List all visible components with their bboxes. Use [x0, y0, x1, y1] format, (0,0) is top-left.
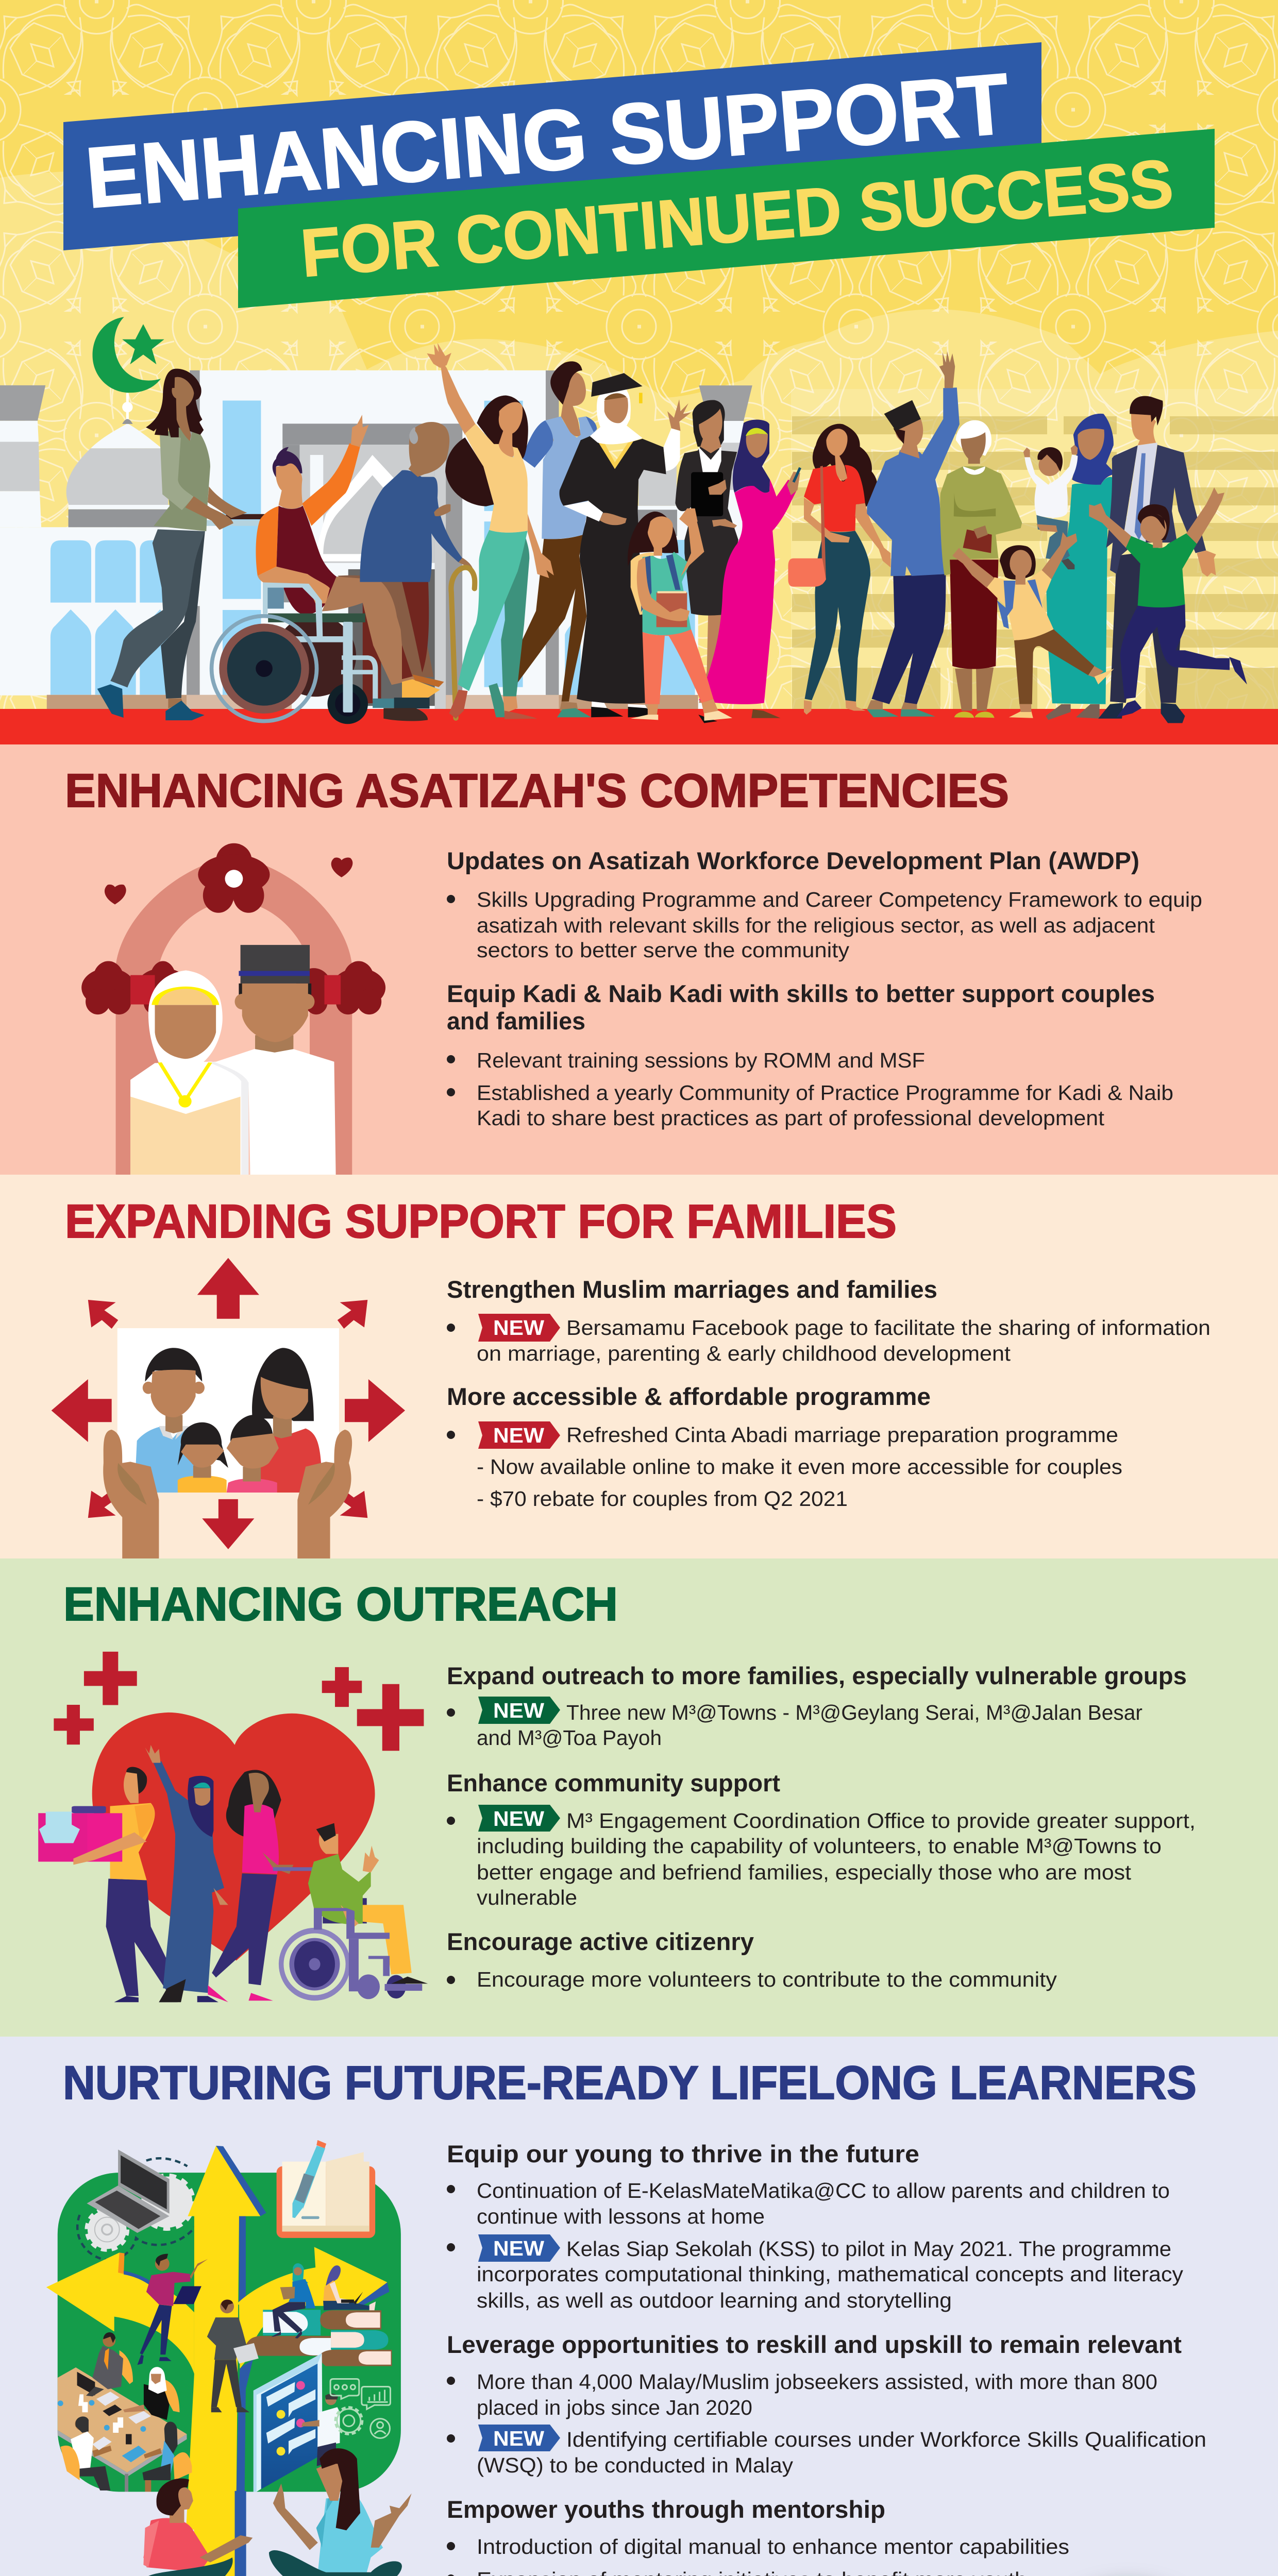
- title banner: Enhancing Support: ENHANCING SUPPORT: [82, 56, 1013, 226]
- text block: More accessible and affordable programme: - $70 rebate for couples from Q2 2021: [477, 1487, 848, 1511]
- text block: Updates on AWDP: [447, 847, 1202, 962]
- text block: Strengthen Muslim marriages: on marriage, parenting & early childhood development: [477, 1342, 1011, 1365]
- figure: elderly woman with purse: [940, 420, 1022, 718]
- text block: Equip Kadi and Naib Kadi: Established a yearly Community of Practice Programme for Kadi & Naib: [477, 1081, 1173, 1105]
- text block: Equip our young: Equip our young to thrive in the future: [447, 2140, 919, 2167]
- text block: Equip Kadi and Naib Kadi: Kadi to share best practices as part of professional development: [477, 1106, 1105, 1130]
- heading: EXPANDING SUPPORT FOR FAMILIES: [65, 1195, 897, 1248]
- text block: Expand outreach: [447, 1662, 1187, 1750]
- illustration: mosque and city buildings: [0, 317, 547, 712]
- figure: women reading on books: [272, 2263, 376, 2338]
- tablet: [254, 2353, 340, 2492]
- text block: Updates on AWDP: Skills Upgrading Programme and Career Competency Framework to equip: [477, 888, 1202, 911]
- figure: man pointing with laptop: [137, 2254, 208, 2365]
- text block: Leverage opportunities: [447, 2331, 1206, 2477]
- figure: man in blue baju and songkok: [867, 351, 960, 717]
- text block: Equip Kadi and Naib Kadi: Relevant training sessions by ROMM and MSF: [477, 1048, 925, 1072]
- text block: Enhance community support: including building the capability of volunteers, to enable M³@Towns to: [477, 1834, 1162, 1858]
- text block: Encourage active citizenry: [447, 1928, 1057, 1991]
- meeting table with four people: [58, 2332, 192, 2492]
- text block: Equip our young: continue with lessons at home: [477, 2205, 765, 2228]
- illustration: woman pushing wheelchair and man in wheelchair: [97, 369, 433, 724]
- heading: NURTURING FUTURE-READY LIFELONG LEARNERS: [63, 2057, 1197, 2109]
- text block: Enhance community support: vulnerable: [477, 1886, 577, 1909]
- text block: Strengthen Muslim marriages: [447, 1276, 1210, 1365]
- tag: new: NEW: [493, 1423, 544, 1447]
- text block: Leverage opportunities: placed in jobs since Jan 2020: [477, 2396, 752, 2419]
- figure: boy in yellow with backpack: [952, 532, 1114, 718]
- text block: Encourage active citizenry: Encourage active citizenry: [447, 1928, 754, 1955]
- illustration: hands holding family photo with arrows: [52, 1258, 405, 1559]
- figure: man in suit: [207, 2299, 259, 2412]
- text block: Enhance community support: [447, 1769, 1196, 1909]
- text block: Equip our young: [447, 2140, 1184, 2312]
- figure: mother in teal with child: [1023, 414, 1116, 720]
- text block: Leverage opportunities: Identifying certifiable courses under Workforce Skills Qualification: [566, 2428, 1206, 2451]
- text block: Empower youths: [447, 2496, 1069, 2576]
- tag: new: NEW: [493, 1699, 544, 1722]
- figure: girl with backpack and book: [628, 509, 732, 723]
- figure: boy in green jumping: [1089, 487, 1247, 717]
- text block: Equip our young: Kelas Siap Sekolah (KSS) to pilot in May 2021. The programme: [566, 2237, 1171, 2261]
- text block: Updates on AWDP: asatizah with relevant skills for the religious sector, as well as adjacent: [477, 913, 1155, 937]
- text block: Equip our young: Continuation of E-KelasMateMatika@CC to allow parents and children to: [477, 2179, 1170, 2202]
- tag: new: NEW: [493, 2427, 544, 2450]
- figure: woman in red with bag: [788, 424, 890, 715]
- text block: More accessible and affordable programme: - Now available online to make it even more accessible for couples: [477, 1455, 1122, 1479]
- title banner: For Continued Success: FOR CONTINUED SUCCESS: [298, 145, 1176, 291]
- icons: chat, chart, gear, user: [330, 2379, 390, 2438]
- tag: new: NEW: [493, 2236, 544, 2260]
- illustration: right group of people: [788, 351, 1247, 723]
- text block: More accessible and affordable programme: [447, 1383, 1122, 1511]
- figure: elderly man with cane: [360, 422, 475, 721]
- text block: Leverage opportunities: (WSQ) to be conducted in Malay: [477, 2453, 794, 2477]
- text block: More accessible and affordable programme: More accessible & affordable programme: [447, 1383, 931, 1410]
- illustration: learning paths, laptop, book, meeting, tablet: [46, 2140, 401, 2530]
- text block: Leverage opportunities: More than 4,000 Malay/Muslim jobseekers assisted, with more than 800: [477, 2370, 1157, 2394]
- text block: Enhance community support: Enhance community support: [447, 1769, 780, 1797]
- tag: new: NEW: [493, 1807, 544, 1831]
- text block: Strengthen Muslim marriages: Bersamamu Facebook page to facilitate the sharing of information: [566, 1316, 1210, 1340]
- panel: Nurturing Future-Ready Lifelong Learners: [0, 2037, 1278, 2576]
- heading: ENHANCING ASATIZAH'S COMPETENCIES: [65, 765, 1009, 817]
- text block: Expand outreach: Expand outreach to more families, especially vulnerable groups: [447, 1662, 1187, 1689]
- tag: new: [478, 1421, 560, 1449]
- red floor: [0, 709, 1278, 744]
- tag: new: [478, 1314, 560, 1342]
- tag: new: [478, 2234, 560, 2262]
- figure: woman in pink dress: [699, 420, 800, 718]
- tag: new: [478, 1805, 560, 1832]
- text block: Expand outreach: and M³@Toa Payoh: [477, 1726, 662, 1750]
- panel: Expanding Support for Families: [0, 1175, 1278, 1559]
- figure: businesswoman with folder: [675, 400, 738, 703]
- text block: Equip our young: incorporates computational thinking, mathematical concepts and literacy: [477, 2262, 1184, 2286]
- text block: Empower youths: Introduction of digital manual to enhance mentor capabilities: [477, 2535, 1069, 2558]
- figure: man in blue shirt: [503, 361, 597, 717]
- heading: ENHANCING OUTREACH: [63, 1578, 618, 1631]
- text block: Updates on AWDP: sectors to better serve the community: [477, 938, 850, 962]
- illustration: volunteers and heart with crosses: [38, 1652, 428, 2002]
- figure: waving woman: [427, 343, 554, 719]
- text block: Expand outreach: Three new M³@Towns - M³@Geylang Serai, M³@Jalan Besar: [566, 1701, 1142, 1724]
- text block: Strengthen Muslim marriages: Strengthen Muslim marriages and families: [447, 1276, 937, 1303]
- figure: graduate in gown: [559, 373, 691, 717]
- text block: Equip Kadi and Naib Kadi: Equip Kadi & Naib Kadi with skills to better support couples: [447, 980, 1155, 1007]
- panel: Enhancing Outreach: [0, 1558, 1278, 2037]
- panel: hero background with pattern: [0, 0, 1278, 711]
- text block: Enhance community support: better engage and befriend families, especially those who are most: [477, 1860, 1132, 1884]
- text block: Encourage active citizenry: Encourage more volunteers to contribute to the community: [477, 1968, 1057, 1991]
- text block: Equip our young: skills, as well as outdoor learning and storytelling: [477, 2289, 952, 2312]
- text block: More accessible and affordable programme: Refreshed Cinta Abadi marriage preparation programme: [566, 1423, 1118, 1447]
- illustration: two seated mentors: [97, 2448, 412, 2576]
- illustration: central group of people: [360, 343, 800, 723]
- figure: father in suit: [1098, 396, 1216, 723]
- panel: Enhancing Asatizah's Competencies: [0, 744, 1278, 1175]
- text block: Leverage opportunities: Leverage opportunities to reskill and upskill to remain relevant: [447, 2331, 1182, 2358]
- tag: new: [478, 2425, 560, 2451]
- text block: Equip Kadi and Naib Kadi: [447, 980, 1173, 1130]
- text block: Updates on AWDP: Updates on Asatizah Workforce Development Plan (AWDP): [447, 847, 1139, 874]
- text block: Enhance community support: M³ Engagement Coordination Office to provide greater support,: [566, 1809, 1196, 1833]
- text block: Equip Kadi and Naib Kadi: and families: [447, 1007, 585, 1035]
- text block: Empower youths: Empower youths through mentorship: [447, 2496, 885, 2523]
- tag: new: NEW: [493, 1316, 544, 1340]
- tag: new: [478, 1697, 560, 1724]
- illustration: wedding couple under arch: [81, 843, 385, 1175]
- illustration: right side buildings: [435, 370, 752, 709]
